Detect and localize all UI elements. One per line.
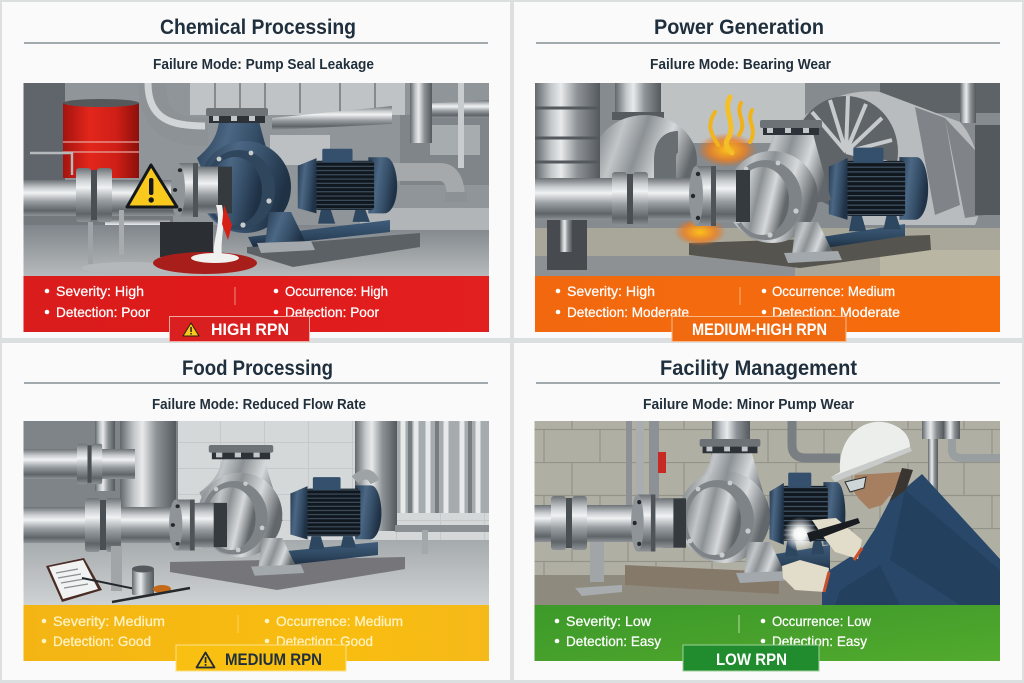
status band: yellow: Detection: Good [276, 633, 373, 649]
failure mode text: Failure Mode: Reduced Flow Rate [152, 397, 366, 413]
status band: red: Detection: Poor [285, 304, 379, 320]
panel: power generation [514, 2, 1022, 342]
status band: green [534, 605, 1000, 661]
status band: orange: Occurrence: Medium [772, 283, 895, 299]
heading: chemical processing: Chemical Processing [160, 16, 356, 39]
status band: green: Occurrence: Low [772, 613, 872, 629]
leak: red puddle and spraying water [153, 205, 257, 274]
illustration: overheating bearing in a power plant [535, 83, 1000, 276]
status band: red: Severity: High [56, 283, 144, 299]
status band: orange: Detection: Moderate [567, 304, 689, 320]
heat glow [674, 133, 757, 246]
status band: red: Detection: Poor [56, 304, 150, 320]
status band: orange [535, 276, 1000, 332]
panel: chemical processing [2, 2, 510, 342]
badge: low rpn: LOW RPN [716, 651, 787, 669]
badge: medium-high rpn: MEDIUM-HIGH RPN [692, 321, 827, 339]
status band: yellow: Occurrence: Medium [276, 613, 403, 629]
warning triangle on pipe [127, 165, 177, 207]
heat flames [710, 97, 753, 153]
badge: medium rpn: MEDIUM RPN [225, 651, 322, 669]
turbine housing [782, 91, 1000, 225]
status band: yellow: Severity: Medium [53, 613, 165, 629]
status band: green: Severity: Low [566, 613, 652, 629]
illustration: leaking pump in a chemical plant [23, 83, 490, 276]
illustration: pump and inspection clipboard in a food plant [23, 421, 489, 605]
status band: yellow [24, 605, 489, 661]
badge: low rpn [683, 645, 819, 671]
heading: food processing: Food Processing [182, 357, 333, 380]
status band: yellow: Detection: Good [53, 633, 151, 649]
failure mode text: Failure Mode: Bearing Wear [650, 57, 831, 73]
status band: orange: Severity: High [567, 283, 655, 299]
badge: medium rpn [176, 645, 346, 671]
illustration: technician inspecting a pump [534, 421, 1000, 605]
tools on the floor [112, 566, 190, 602]
flashlight beam [783, 517, 860, 551]
status band: red [24, 276, 489, 332]
heading: power generation: Power Generation [654, 16, 824, 39]
panel: food processing [2, 343, 510, 680]
stainless steel tanks [397, 421, 489, 513]
status band: green: Detection: Easy [772, 633, 867, 649]
badge: high rpn: HIGH RPN [211, 321, 289, 339]
failure mode text: Failure Mode: Pump Seal Leakage [153, 57, 374, 73]
badge: high rpn [170, 316, 310, 342]
status band: orange: Detection: Moderate [772, 304, 900, 320]
heading: facility management: Facility Management [660, 357, 857, 380]
status band: red: Occurrence: High [285, 283, 388, 299]
badge: medium-high rpn [672, 316, 846, 342]
hard hat [831, 422, 912, 482]
status band: green: Detection: Easy [566, 633, 661, 649]
panel: facility management [514, 343, 1022, 680]
failure mode text: Failure Mode: Minor Pump Wear [643, 397, 854, 413]
technician [782, 422, 1000, 605]
red chemical tank [63, 99, 139, 178]
clipboard with checklist [46, 558, 132, 602]
gloves [782, 518, 862, 592]
